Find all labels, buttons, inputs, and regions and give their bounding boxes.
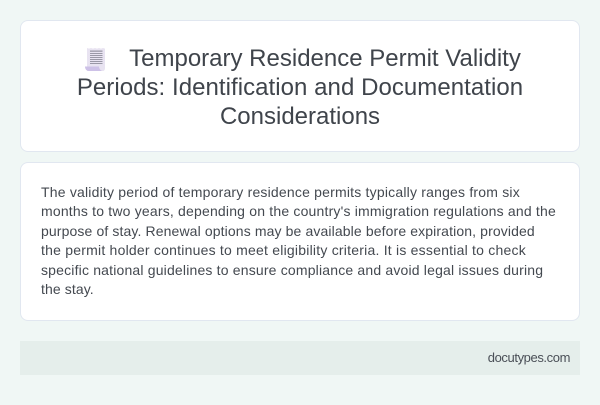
description text [41,184,556,297]
description text: purpose of stay. Renewal options may be available before expiration, provided [41,223,535,239]
description text: months to two years, depending on the country's immigration regulations and the [41,203,556,219]
title line 1: Temporary Residence Permit Validity [129,45,521,72]
icon: document [85,48,105,71]
title line 3: Considerations [220,103,380,130]
title line 2: Periods: Identification and Documentation [77,74,523,101]
description text: The validity period of temporary residence permits typically ranges from six [41,184,520,200]
description text: specific national guidelines to ensure compliance and avoid legal issues during [41,262,543,278]
panel: title card [20,20,580,152]
title [77,45,523,130]
panel: description card [20,162,580,321]
footer source text: docutypes.com [488,350,570,365]
description text: the stay. [41,281,94,297]
description text: the permit holder continues to meet eligibility criteria. It is essential to check [41,242,526,258]
footer bar [20,341,580,375]
